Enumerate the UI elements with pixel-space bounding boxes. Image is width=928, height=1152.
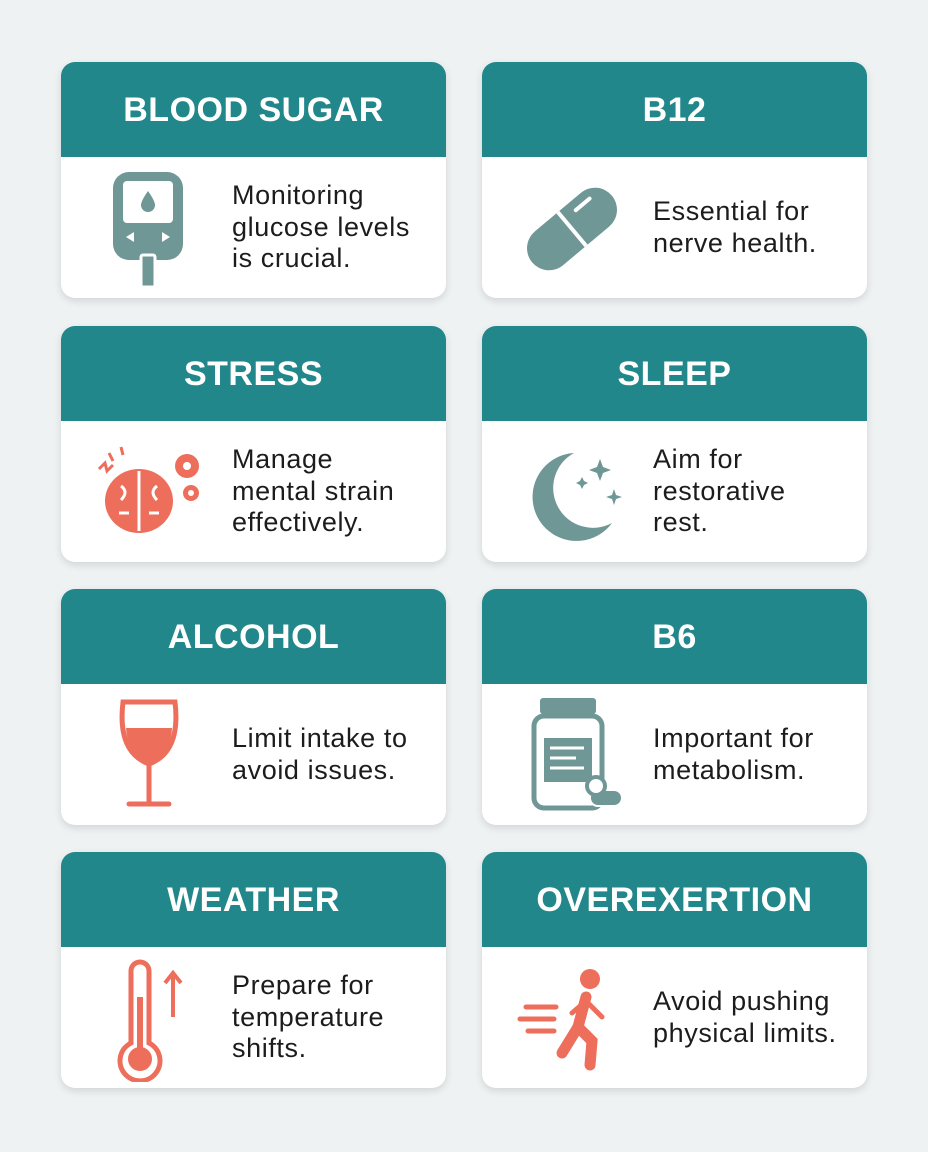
card: b6: [482, 589, 867, 825]
text: [653, 444, 786, 537]
text: Essential for: [653, 196, 809, 226]
heading: alcohol: ALCOHOL: [168, 618, 339, 656]
icon: capsule: [527, 188, 617, 270]
text: [232, 970, 384, 1063]
heading: sleep: SLEEP: [618, 355, 731, 393]
text: physical limits.: [653, 1018, 837, 1048]
heading: stress: STRESS: [184, 355, 323, 393]
icon: glucose meter: [113, 172, 183, 286]
text: [232, 180, 410, 273]
text: metabolism.: [653, 754, 805, 784]
heading: blood sugar: BLOOD SUGAR: [123, 91, 384, 129]
card: overexertion: [482, 852, 867, 1088]
text: glucose levels: [232, 212, 410, 242]
text: [653, 723, 814, 784]
card: sleep: [482, 326, 867, 562]
text: Avoid pushing: [653, 986, 830, 1016]
text: Monitoring: [232, 180, 364, 210]
heading: overexertion: [482, 852, 867, 947]
heading: b12: [482, 62, 867, 157]
heading: sleep: [482, 326, 867, 421]
heading: stress: [61, 326, 446, 421]
heading: alcohol: [61, 589, 446, 684]
card: blood sugar: [61, 62, 446, 298]
text: Aim for: [653, 444, 743, 474]
text: [232, 444, 394, 537]
text: [232, 723, 408, 784]
text: temperature: [232, 1002, 384, 1032]
text: Prepare for: [232, 970, 374, 1000]
heading: b12: B12: [643, 91, 706, 129]
card: weather: [61, 852, 446, 1088]
icon: brain with gears: [98, 446, 199, 533]
text: effectively.: [232, 507, 364, 537]
text: shifts.: [232, 1033, 307, 1063]
text: [653, 196, 817, 258]
text: rest.: [653, 507, 709, 537]
text: avoid issues.: [232, 754, 396, 784]
heading: b6: [482, 589, 867, 684]
text: nerve health.: [653, 228, 817, 258]
text: Important for: [653, 723, 814, 753]
heading: blood sugar: [61, 62, 446, 157]
card: stress: [61, 326, 446, 562]
text: Manage: [232, 444, 333, 474]
icon: running person: [518, 969, 604, 1070]
text: is crucial.: [232, 243, 351, 273]
icon: moon and stars: [532, 453, 622, 541]
card: b12: [482, 62, 867, 298]
card: alcohol: [61, 589, 446, 825]
text: Limit intake to: [232, 723, 408, 753]
icon: supplement bottle: [532, 698, 621, 810]
heading: weather: WEATHER: [167, 881, 340, 919]
icon: wine glass: [120, 700, 178, 806]
text: [653, 986, 837, 1048]
text: mental strain: [232, 476, 394, 506]
heading: b6: B6: [652, 618, 697, 656]
icon: thermometer: [118, 960, 182, 1082]
heading: overexertion: OVEREXERTION: [536, 881, 813, 919]
text: restorative: [653, 476, 786, 506]
heading: weather: [61, 852, 446, 947]
